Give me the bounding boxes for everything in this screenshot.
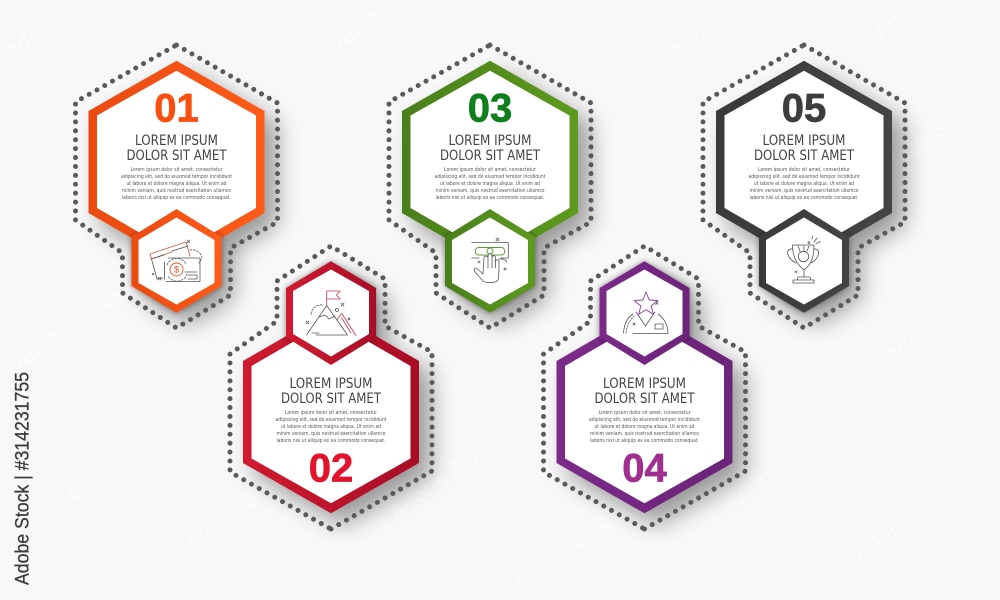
heading 01: LOREM IPSUM: [135, 133, 218, 149]
infographic canvas: Adobe Stock: [50, 421, 168, 514]
heading 03: DOLOR SIT AMET: [440, 148, 540, 164]
body text 02: ut labore et dolore magna aliqua. Ut enim ad: [281, 424, 381, 430]
icon: credit card and dollar laptop: [150, 240, 202, 282]
body text 01: laboris nisi ut aliquip ex ea commodo consequat.: [122, 195, 231, 201]
body text 01: Lorem ipsum dolor sit amet, consectetur: [130, 167, 223, 173]
icon: trophy: [788, 236, 820, 283]
body text 02: adipiscing elit, sed do eiusmod tempor incididunt: [276, 417, 386, 423]
body text 04: minim veniam, quis nostrud exercitation ullamco: [590, 431, 699, 437]
number 02: 02: [309, 446, 353, 490]
body text 03: Lorem ipsum dolor sit amet, consectetur: [444, 167, 537, 173]
heading 04: DOLOR SIT AMET: [594, 391, 695, 407]
heading 02: [281, 376, 381, 407]
body text 02: laboris nisi ut aliquip ex ea commodo consequat.: [276, 438, 386, 444]
body text 02: Lorem ipsum dolor sit amet, consectetur: [285, 410, 378, 416]
heading 03: [440, 133, 540, 164]
heading 05: [754, 133, 854, 164]
number 03: 03: [468, 86, 512, 130]
body text 03: [434, 167, 546, 201]
body text 05: minim veniam, quis nostrud exercitation ullamco: [750, 188, 858, 194]
number 05: 05: [782, 86, 826, 130]
body text 05: [748, 167, 860, 201]
body text 02: minim veniam, quis nostrud exercitation ullamco: [276, 431, 386, 437]
body text 05: adipiscing elit, sed do eiusmod tempor incididunt: [748, 174, 860, 180]
infographic canvas: Adobe Stock: [720, 421, 838, 514]
body text 02: [276, 410, 386, 444]
body text 04: [589, 410, 700, 444]
body text 05: Lorem ipsum dolor sit amet, consectetur: [758, 167, 851, 173]
infographic canvas: Adobe Stock: [10, 281, 128, 374]
heading 04: LOREM IPSUM: [603, 376, 686, 392]
heading 02: LOREM IPSUM: [290, 376, 372, 392]
panel 02 frame: [230, 246, 432, 529]
infographic canvas: Adobe Stock: [385, 431, 503, 524]
body text 04: laboris nisi ut aliquip ex ea commodo consequat.: [590, 438, 699, 444]
icon: hand on banknote: [472, 238, 508, 283]
heading 01: DOLOR SIT AMET: [126, 148, 227, 164]
body text 05: laboris nisi ut aliquip ex ea commodo consequat.: [750, 195, 859, 201]
body text 04: adipiscing elit, sed do eiusmod tempor incididunt: [589, 417, 700, 423]
infographic canvas: Adobe Stock: [180, 461, 298, 554]
infographic canvas: Adobe Stock: [870, 91, 988, 184]
panel: step 01: [76, 45, 278, 328]
body text 01: [121, 167, 232, 201]
body text 01: ut labore et dolore magna aliqua. Ut enim ad: [126, 181, 226, 187]
heading 01: [126, 133, 227, 164]
infographic canvas: Adobe Stock: [850, 471, 968, 564]
heading 02: DOLOR SIT AMET: [281, 391, 381, 407]
panel 05 frame: [703, 45, 905, 328]
heading 05: DOLOR SIT AMET: [754, 148, 854, 164]
body text 03: minim veniam, quis nostrud exercitation ullamco: [436, 188, 544, 194]
vertical stock id caption: Adobe Stock | #314231755: [12, 372, 34, 585]
panel: step 05: [703, 45, 905, 328]
body text 04: Lorem ipsum dolor sit amet, consectetur: [598, 410, 691, 416]
heading 05: LOREM IPSUM: [762, 133, 846, 149]
body text 03: laboris nisi ut aliquip ex ea commodo consequat.: [436, 195, 545, 201]
body text 01: minim veniam, quis nostrud exercitation ullamco: [122, 188, 231, 194]
panel: step 04: [544, 246, 746, 529]
number 04: 04: [622, 446, 667, 490]
panel 04 frame: [544, 246, 746, 529]
panel 03 frame: [389, 45, 591, 328]
icon: credit card and dollar laptop: $: [174, 264, 179, 274]
infographic canvas: Adobe Stock: [510, 501, 628, 594]
panel: step 03: [389, 45, 591, 328]
body text 03: adipiscing elit, sed do eiusmod tempor incididunt: [434, 174, 546, 180]
panel 01 frame: [76, 45, 278, 328]
number 01: 01: [154, 86, 199, 130]
icon: person with star: [624, 292, 668, 334]
body text 05: ut labore et dolore magna aliqua. Ut enim ad: [754, 181, 854, 187]
panel: step 02: [230, 246, 432, 529]
body text 01: adipiscing elit, sed do eiusmod tempor incididunt: [121, 174, 232, 180]
icon: mountain with flag: [306, 291, 356, 336]
body text 04: ut labore et dolore magna aliqua. Ut enim ad: [594, 424, 694, 430]
infographic canvas: Adobe Stock: [880, 276, 998, 369]
body text 03: ut labore et dolore magna aliqua. Ut enim ad: [440, 181, 540, 187]
heading 04: [594, 376, 695, 407]
heading 03: LOREM IPSUM: [448, 133, 532, 149]
